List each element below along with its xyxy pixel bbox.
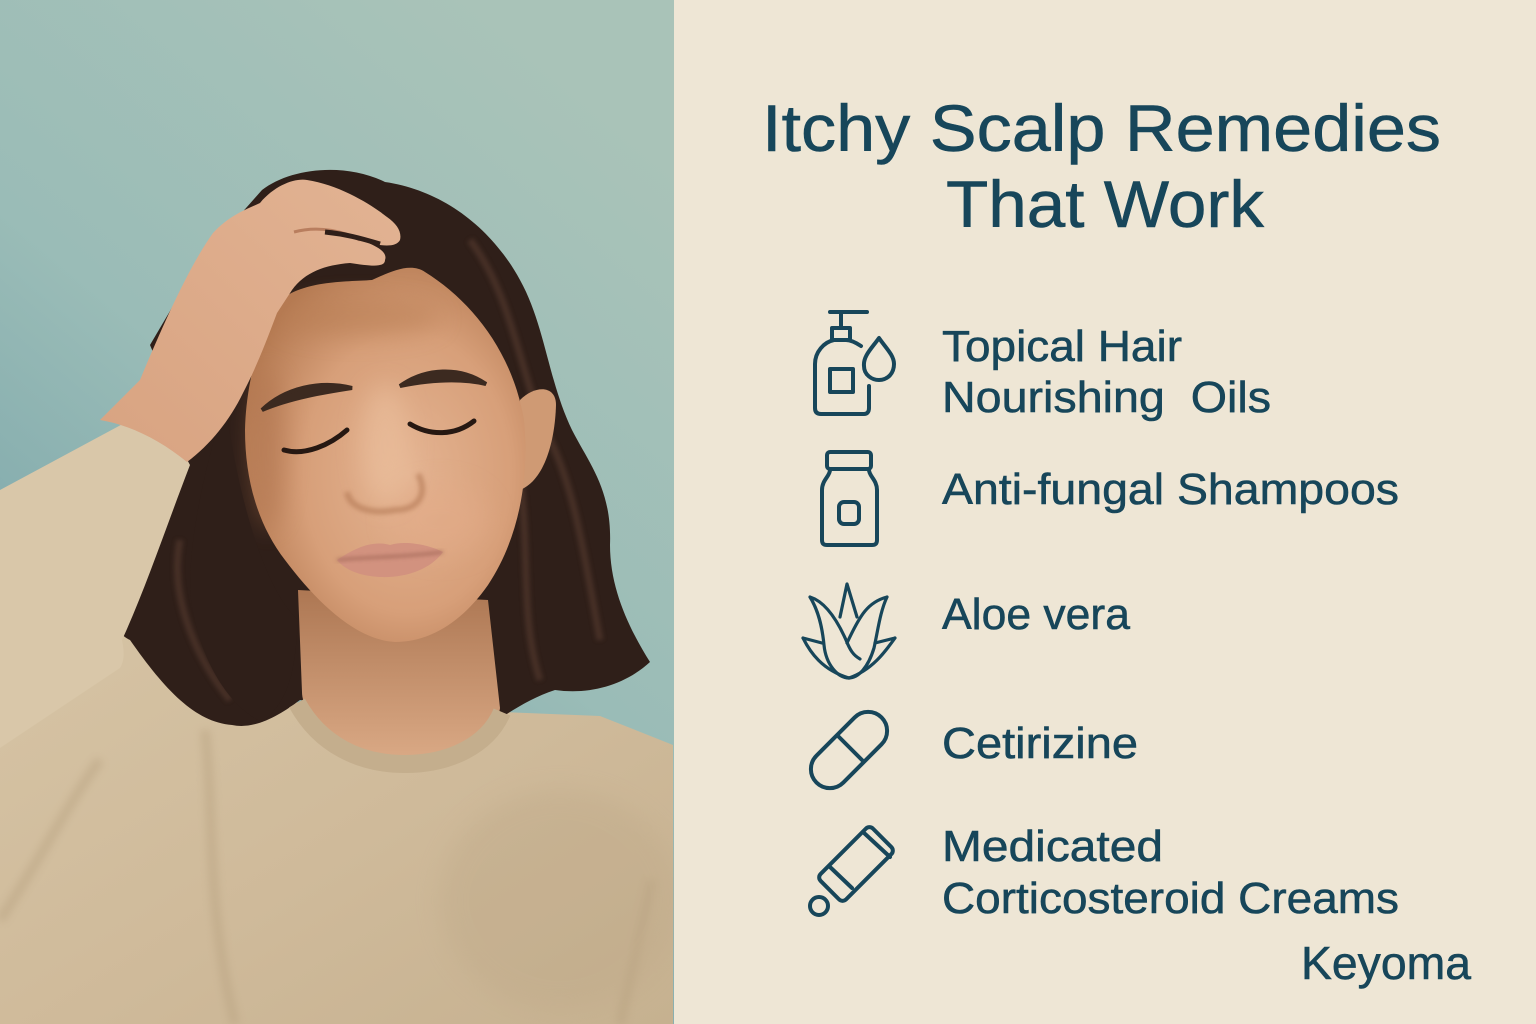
sleeve raised to head <box>0 420 190 748</box>
right eyebrow <box>400 371 486 386</box>
text: medicated corticosteroid creams: Corticosteroid Creams <box>942 874 1399 923</box>
hair <box>120 170 650 726</box>
right closed eye <box>410 421 474 433</box>
icon: aloe vera <box>803 584 895 678</box>
brand name: Keyoma <box>1301 937 1471 989</box>
text: aloe vera: Aloe vera <box>942 590 1131 639</box>
neck collar ribbing <box>297 703 502 764</box>
hand on scalp <box>100 180 400 462</box>
title <box>762 91 1441 241</box>
face <box>245 268 526 642</box>
text: medicated corticosteroid creams: Medicated <box>942 822 1163 871</box>
hair lock beside face <box>190 400 298 722</box>
text: topical oils: Topical Hair <box>942 322 1182 371</box>
sweater body <box>0 600 680 1024</box>
wall background <box>0 0 674 1024</box>
icon: pump bottle with drop <box>815 312 894 414</box>
title: Itchy Scalp Remedies <box>762 91 1441 165</box>
panel: photo of woman scratching her scalp <box>0 0 680 1024</box>
icon: capsule <box>803 704 895 796</box>
left eyebrow <box>262 385 352 410</box>
nose <box>347 474 422 511</box>
title: That Work <box>946 167 1265 241</box>
text: topical oils: Nourishing Oils <box>942 373 1271 422</box>
neck <box>298 590 500 756</box>
left closed eye <box>284 430 347 452</box>
ear <box>520 389 556 490</box>
text: medicated corticosteroid creams <box>942 822 1399 923</box>
panel: remedies <box>674 0 1536 1024</box>
icon: shampoo jar <box>822 452 877 545</box>
icon: cream tube <box>810 825 895 915</box>
text: anti-fungal shampoos: Anti-fungal Shampoos <box>942 465 1399 514</box>
text: cetirizine: Cetirizine <box>942 719 1138 768</box>
cream background <box>674 0 1536 1024</box>
lips <box>337 543 443 577</box>
text: topical oils <box>942 322 1271 422</box>
